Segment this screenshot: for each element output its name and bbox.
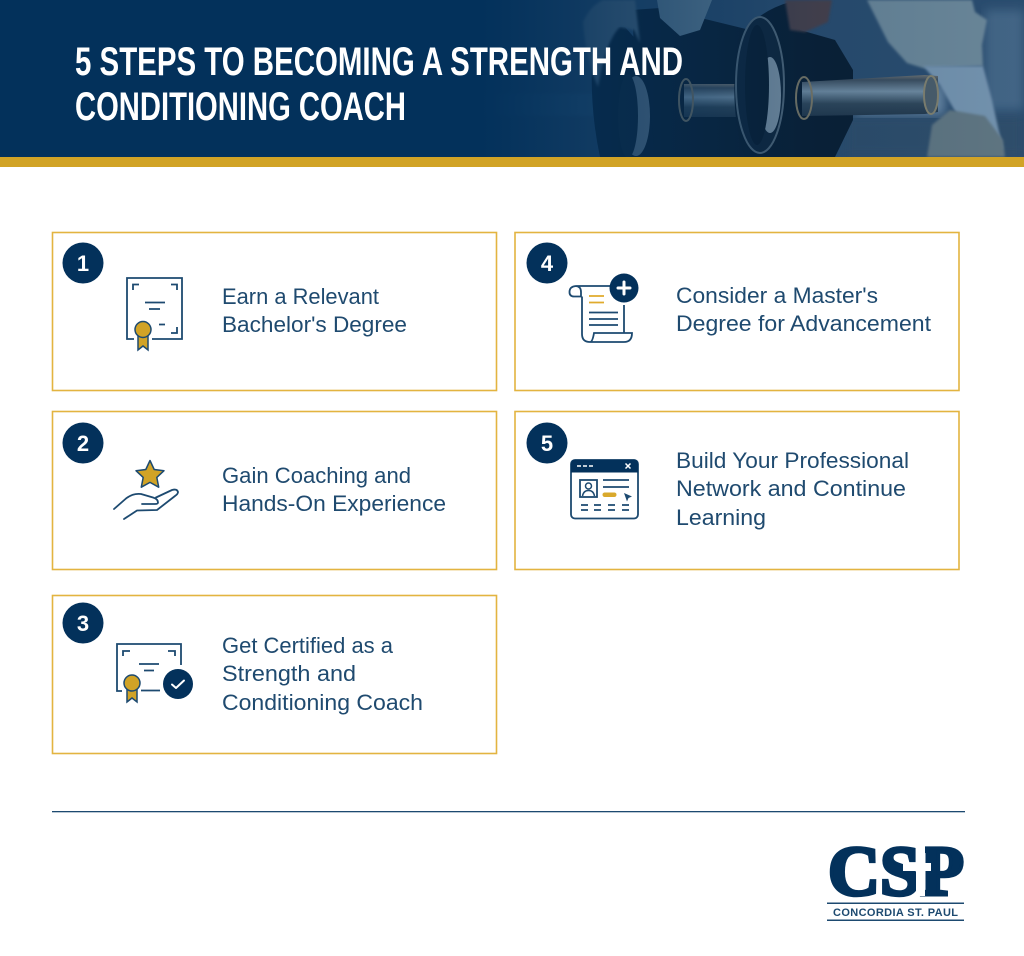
step 2 text: Hands-On Experience (222, 491, 446, 516)
step 5 text: Build Your Professional (676, 448, 909, 473)
number badge 1 (62, 242, 104, 284)
panel: step 4 (515, 232, 959, 390)
icon: browser profile window (571, 460, 638, 518)
front plate (734, 2, 853, 157)
icon: diploma with seal (127, 278, 182, 350)
panel: step 3 (52, 596, 496, 754)
gold band (0, 157, 1024, 167)
step 3 text: Conditioning Coach (222, 690, 423, 715)
step 5 text: Network and Continue (676, 476, 906, 501)
back bar (480, 94, 600, 116)
number badge 4 (526, 242, 568, 284)
step 4 text: Degree for Advancement (676, 311, 932, 336)
icon: certificate with check (117, 644, 193, 702)
left sleeve (684, 84, 739, 117)
step 3 text: Strength and (222, 661, 356, 686)
title (75, 40, 683, 129)
rear plate (633, 8, 746, 157)
step 1 text: Earn a Relevant (222, 284, 380, 309)
panel: step 1 (52, 232, 496, 390)
step 5 text: Learning (676, 505, 766, 530)
step 3 text: Get Certified as a (222, 633, 393, 658)
number badge 2: 2 (77, 431, 89, 456)
left hand (583, 0, 640, 87)
number badge 3: 3 (77, 611, 89, 636)
icon: hand holding star (114, 460, 178, 519)
header banner (0, 0, 1024, 167)
panel: step 5 (515, 412, 959, 570)
photo: barbell and plates (544, 0, 1024, 157)
title: 5 STEPS TO BECOMING A STRENGTH AND (75, 40, 683, 84)
step 1 text: Bachelor's Degree (222, 312, 407, 337)
number badge 1: 1 (77, 251, 89, 276)
number badge 5: 5 (541, 431, 553, 456)
right sleeve (802, 75, 938, 116)
number badge 5 (526, 422, 568, 464)
title: CONDITIONING COACH (75, 85, 406, 129)
logo: Concordia St. Paul: CONCORDIA ST. PAUL (833, 907, 958, 919)
number badge 4: 4 (541, 251, 554, 276)
jacket (867, 0, 987, 68)
number badge 2 (62, 422, 104, 464)
step 2 text: Gain Coaching and (222, 463, 411, 488)
number badge 3 (62, 602, 104, 644)
footer divider (52, 811, 965, 812)
right hand (785, 0, 832, 32)
logo: Concordia St. Paul: CSP (828, 833, 964, 911)
panel: step 2 (52, 412, 496, 570)
step 4 text: Consider a Master's (676, 283, 878, 308)
icon: scroll with plus (570, 274, 638, 342)
